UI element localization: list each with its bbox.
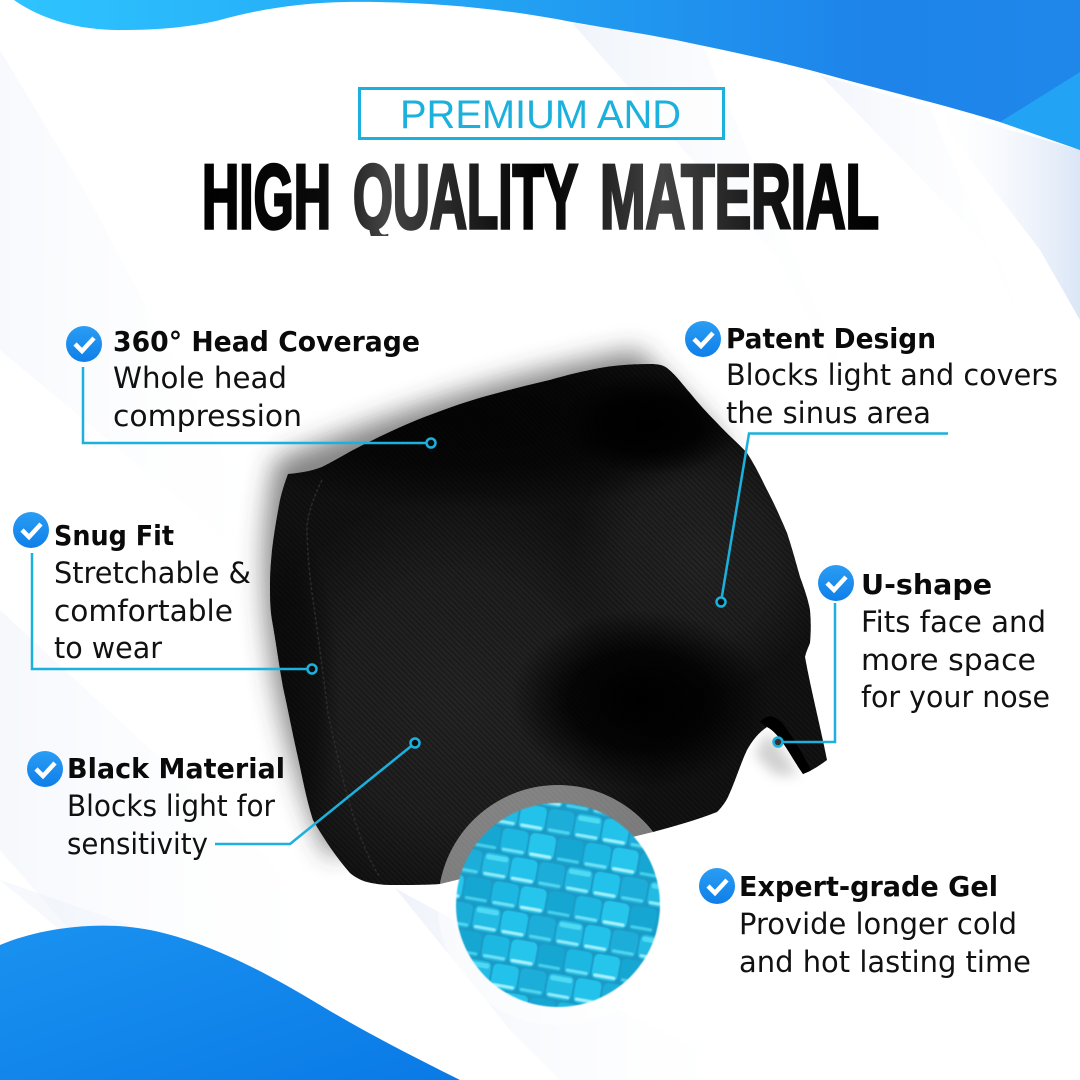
heading badge [360, 88, 724, 138]
title: MATERIAL [600, 147, 879, 248]
callout: snug fit: to wear [54, 631, 162, 665]
callout: snug fit: Stretchable & [54, 556, 251, 590]
callout: 360 head coverage: 360° Head Coverage [113, 325, 420, 358]
gel close-up circle [438, 785, 678, 1025]
mask body [270, 364, 827, 885]
title: HIGH [202, 147, 331, 248]
callout: u-shape [774, 565, 1050, 746]
callout: expert-grade gel: and hot lasting time [739, 945, 1031, 979]
product: black gel mask [245, 334, 827, 885]
title: QUALITY [353, 147, 578, 248]
callout: 360 head coverage: Whole head [113, 361, 287, 395]
callout: patent design: the sinus area [726, 396, 931, 430]
callout: u-shape: for your nose [861, 680, 1050, 714]
top blue wave [14, 0, 1080, 150]
callout: patent design: Blocks light and covers [726, 358, 1058, 392]
inner nose lip [760, 716, 812, 778]
title [204, 162, 878, 236]
callout: black material: Black Material [67, 752, 285, 785]
callout: 360 head coverage: compression [113, 399, 302, 433]
callout: black material: Blocks light for [67, 789, 275, 823]
heading badge: PREMIUM AND [400, 93, 681, 137]
halo [438, 785, 678, 1025]
callout: u-shape: Fits face and [861, 605, 1046, 639]
callout: u-shape: U-shape [861, 568, 992, 601]
mask drop shadow [265, 350, 728, 856]
callout: expert-grade gel: Expert-grade Gel [739, 870, 998, 903]
callout: patent design [685, 321, 1058, 606]
callout: snug fit: comfortable [54, 594, 233, 628]
callout: u-shape: more space [861, 643, 1036, 677]
callout: 360 head coverage [66, 325, 436, 448]
callout: expert-grade gel [699, 868, 1031, 979]
bottom left blue wave [0, 926, 460, 1080]
callout: expert-grade gel: Provide longer cold [739, 907, 1017, 941]
callout: snug fit: Snug Fit [54, 519, 174, 552]
callout: black material [27, 738, 420, 861]
seam [307, 480, 380, 877]
shadow under nose arch [755, 732, 798, 775]
callout: black material: sensitivity [67, 827, 208, 861]
callout: patent design: Patent Design [726, 322, 936, 355]
callout: snug fit [13, 512, 316, 674]
